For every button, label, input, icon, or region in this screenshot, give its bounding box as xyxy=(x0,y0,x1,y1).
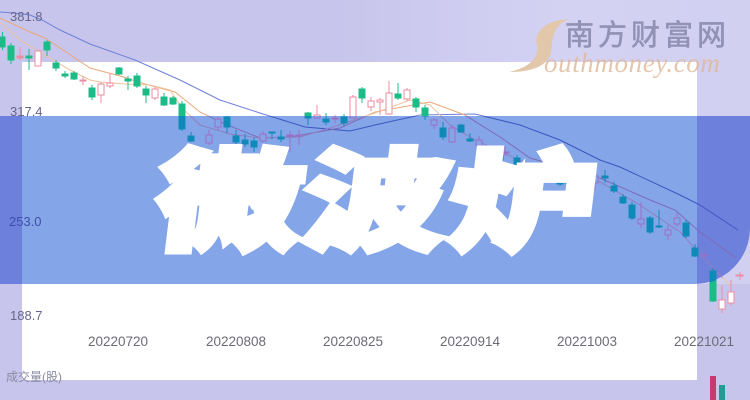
y axis labels: 188.7 xyxy=(10,308,43,323)
x axis date labels: 20221003 xyxy=(557,334,617,349)
bottom lavender strip xyxy=(0,284,750,400)
x axis date labels: 20220720 xyxy=(88,334,148,349)
x axis date labels: 20221021 xyxy=(674,334,734,349)
logo domain: outhmoney.com xyxy=(544,48,721,78)
x axis date labels: 20220808 xyxy=(206,334,266,349)
title: 微波炉 xyxy=(149,142,603,265)
y axis labels xyxy=(9,9,43,323)
volume axis label: 成交量(股) xyxy=(6,370,62,384)
candles outside the band xyxy=(0,12,743,313)
logo swoosh xyxy=(510,19,569,72)
volume bars xyxy=(710,376,725,400)
candles inside the band xyxy=(178,116,738,282)
y axis labels: 253.0 xyxy=(9,214,42,229)
blue banner band xyxy=(0,116,750,284)
logo text: 南方财富网 xyxy=(565,20,730,52)
white chart panel xyxy=(22,62,697,380)
x axis date labels: 20220914 xyxy=(440,334,500,349)
y axis labels: 317.4 xyxy=(10,104,43,119)
x axis date labels xyxy=(88,334,734,349)
x axis date labels: 20220825 xyxy=(323,334,383,349)
y axis labels: 381.8 xyxy=(10,9,43,24)
